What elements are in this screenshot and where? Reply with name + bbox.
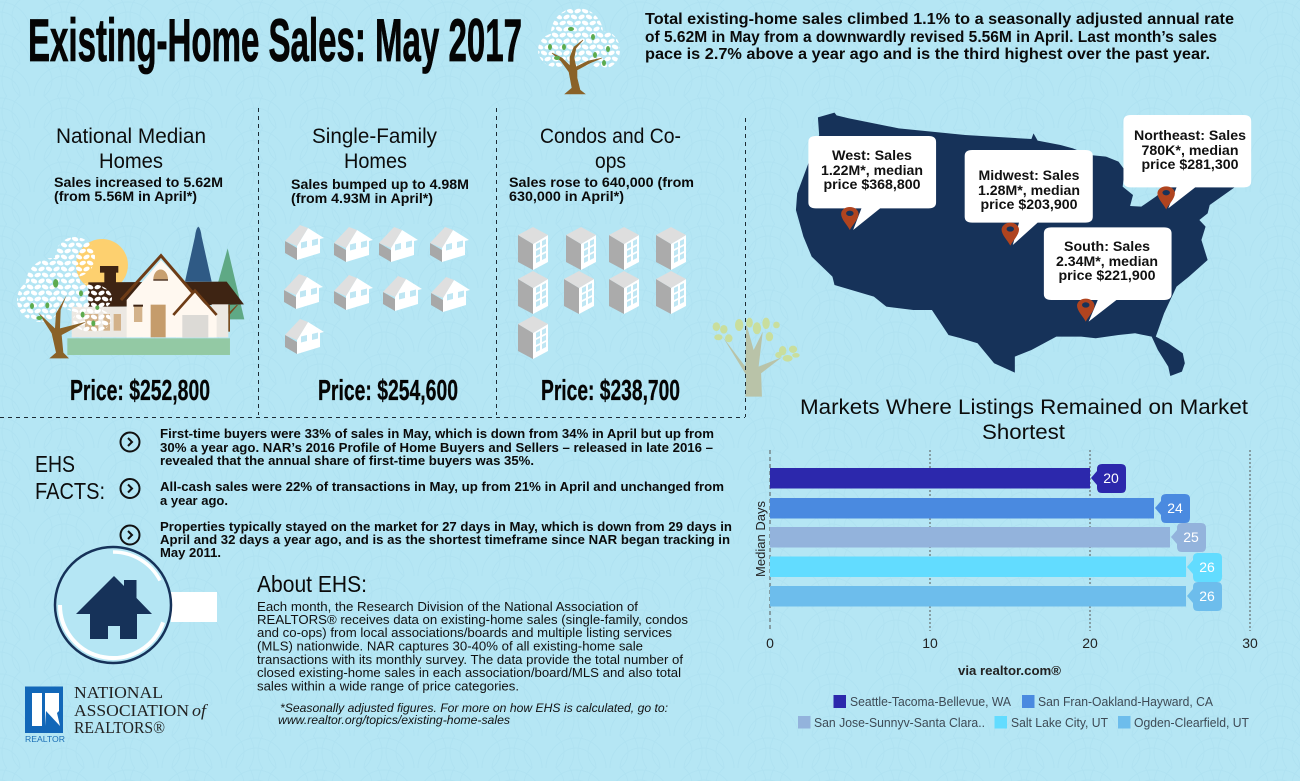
legend: Salt Lake City, UT [1011,716,1108,730]
about text: (MLS) nationwide. NAR captures 30-40% of all existing-home sale [257,638,643,654]
callout: Northeast: 780K*, median [1142,142,1238,158]
bar: San Fran 24 [770,494,1190,523]
bar: San Fran 24: 24 [1167,500,1183,516]
bar: San Jose 25 [770,523,1206,552]
heading: EHS facts [35,451,105,504]
intro text block: pace is 2.7% above a year ago and is the third highest over the past year. [645,46,1210,63]
icon: house in circle [55,547,217,663]
sales text: Sales increased to 5.62M [54,175,223,190]
legend [798,695,1249,730]
fact 2: a year ago. [160,493,228,508]
callout: Midwest: 1.28M*, median [978,182,1080,198]
map: United States [796,113,1235,376]
heading: condos and co-ops: ops [595,150,626,173]
intro text block: Total existing-home sales climbed 1.1% to a seasonally adjusted annual rate [645,11,1234,28]
fact 1: 30% a year ago. NAR’s 2016 Profile of Home Buyers and Sellers – released in late 2016 – [160,440,713,455]
fact 1: First-time buyers were 33% of sales in May, which is down from 34% in April but up from [160,426,714,441]
x axis labels: 10 [922,635,938,651]
about text: transactions with its monthly survey. The data provide the total number of [257,652,683,667]
callout: Northeast: price $281,300 [1142,156,1239,172]
callout: West [808,136,936,230]
callout: West: price $368,800 [824,176,921,192]
panel: national median homes [17,125,244,407]
logo: National Association of Realtors [25,683,208,744]
callout: South [1044,227,1172,322]
callout: South: 2.34M*, median [1056,253,1158,269]
heading: single-family homes [312,125,437,173]
heading: single-family homes: Single-Family [312,125,437,148]
sales text [291,177,469,206]
sales text: (from 4.93M in April*) [291,191,433,206]
logo: National Association of Realtors: REALTOR [25,734,65,744]
about text: Each month, the Research Division of the National Association of [257,599,638,614]
callout: Midwest: Midwest: Sales [978,167,1080,183]
legend: Seattle-Tacoma-Bellevue, WA [850,695,1012,709]
sales text: Sales rose to 640,000 (from [509,175,694,190]
about text [257,599,688,694]
footnote: *Seasonally adjusted figures. For more on how EHS is calculated, go to: [280,701,668,715]
icon: white blossom tree [538,8,620,94]
x axis labels: 20 [1082,635,1098,651]
panel: listings bar chart [753,395,1258,730]
legend: San Fran-Oakland-Hayward, CA [1038,695,1214,709]
icon: chevron bullet [120,432,140,452]
sales text: 630,000 in April*) [509,189,624,204]
callout: South: South: Sales [1064,238,1150,254]
about text: closed existing-home sales in each association/board/MLS and also total [257,665,681,680]
heading: EHS facts: EHS [35,451,75,477]
intro text block [645,11,1234,63]
heading: national median homes: Homes [99,150,163,173]
heading: condos and co-ops: Condos and Co- [540,125,681,148]
icon: chevron bullet [120,479,140,498]
logo: National Association of Realtors: NATIONAL [74,683,163,702]
sales text [54,175,223,204]
logo: National Association of Realtors: ASSOCIATION [74,701,189,720]
about text: and co-ops) from local associations/boards and multiple listing services [257,625,673,640]
bar: Salt Lake City 26: 26 [1199,559,1215,575]
heading: national median homes [56,125,206,173]
callout: Midwest [965,150,1093,246]
callout: West: 1.22M*, median [821,162,923,178]
heading: single-family homes: Homes [344,150,407,173]
x axis labels: 0 [766,635,774,651]
panel: condos and co-ops [509,125,694,407]
heading: condos and co-ops [540,125,681,173]
bar: Salt Lake City 26 [770,553,1222,582]
bar: Seattle 20 [770,464,1126,493]
source: via realtor.com® [958,663,1061,678]
chart title: Shortest [982,420,1065,444]
sales text: Sales bumped up to 4.98M [291,177,469,192]
fact 3: Properties typically stayed on the market for 27 days in May, which is down from 29 days in [160,519,732,534]
heading: EHS facts: FACTS: [35,478,105,504]
fact 2 [120,479,724,508]
logo: National Association of Realtors: of [192,701,208,720]
price: Price: $254,600 [318,375,458,407]
illustration: house with tree [17,227,244,358]
chart title: Markets Where Listings Remained on Market [800,395,1248,419]
heading: about EHS: About EHS: [257,571,367,597]
callout: South: price $221,900 [1058,267,1156,283]
about text: REALTORS® receives data on existing-home sales (single-family, condos [257,612,688,627]
panel: about EHS [257,571,688,727]
callout: Midwest: price $203,900 [980,196,1078,212]
pictogram: nine houses [284,225,470,354]
callout: West: West: Sales [832,147,912,163]
bar: Ogden 26 [770,582,1222,611]
intro text block: of 5.62M in May from a downwardly revised 5.56M in April. Last month’s sales [645,29,1217,46]
legend: Ogden-Clearfield, UT [1134,716,1249,730]
icon: chevron bullet [120,526,140,544]
bar: San Jose 25: 25 [1183,529,1199,545]
bar: Seattle 20: 20 [1103,470,1119,486]
callout: Northeast: Northeast: Sales [1134,127,1246,143]
price: Price: $238,700 [541,375,680,407]
fact 1: revealed that the annual share of first-time buyers was 35%. [160,453,534,468]
pictogram: nine condo buildings [518,227,686,359]
title: Existing-Home Sales: May 2017 [28,7,522,74]
fact 1 [120,426,714,468]
heading: national median homes: National Median [56,125,206,148]
panel: EHS facts list [120,426,732,560]
fact 3 [120,519,732,560]
icon: faded tree [713,318,800,397]
callout: Northeast [1123,115,1251,209]
footnote [278,701,668,727]
x axis labels [766,635,1258,651]
sales text [509,175,694,204]
footnote: www.realtor.org/topics/existing-home-sales [278,713,510,727]
fact 3: May 2011. [160,545,221,560]
chart title [800,395,1248,444]
price: Price: $252,800 [70,375,210,407]
about text: sales within a wide range of price categories. [257,678,519,694]
logo: National Association of Realtors: REALTORS® [74,718,165,737]
x axis labels: 30 [1242,635,1258,651]
fact 2: All-cash sales were 22% of transactions in May, up from 21% in April and unchanged from [160,479,724,494]
sales text: (from 5.56M in April*) [54,189,197,204]
legend: San Jose-Sunnyv-Santa Clara.. [814,716,985,730]
y axis label: Median Days [753,501,768,577]
bar: Ogden 26: 26 [1199,588,1215,604]
panel: regional map [796,113,1251,376]
fact 3: April and 32 days a year ago, and is as the shortest timeframe since NAR began tracking in [160,532,730,547]
panel: single-family homes [284,125,470,407]
